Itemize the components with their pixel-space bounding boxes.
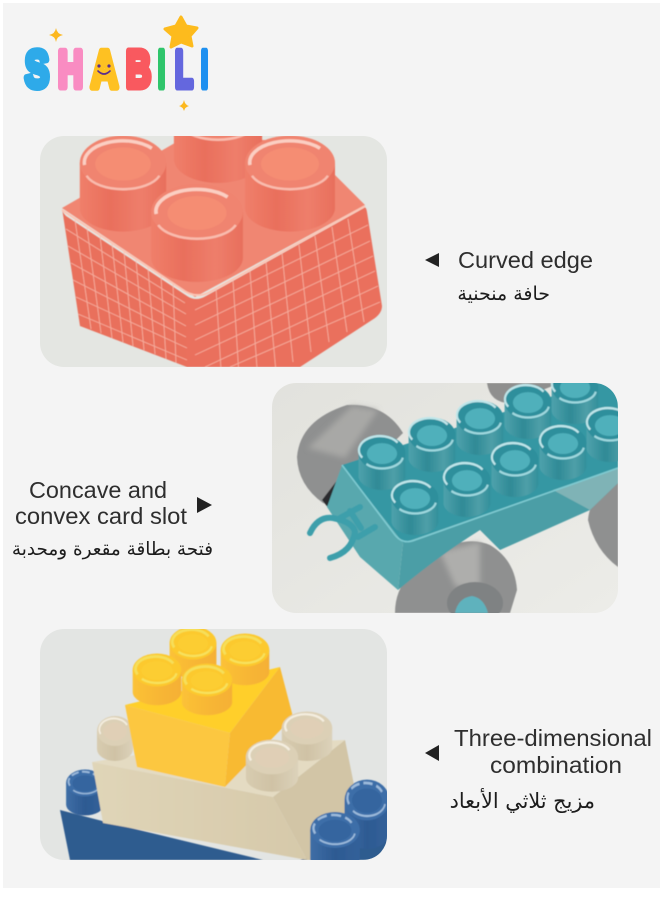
teal car body [327, 383, 618, 590]
yellow studs [133, 626, 269, 715]
label: three-dimensional combination: Three-dimensional [454, 725, 652, 751]
logo lettering [25, 41, 208, 99]
label: card slot Arabic: فتحة بطاقة مقعرة ومحدبة [12, 539, 213, 560]
label: three-dimensional Arabic: مزيج ثلاثي الأبعاد [450, 788, 595, 813]
arrow: card slot [197, 497, 212, 513]
coral brick body [62, 140, 383, 367]
teal clip hook [310, 507, 375, 558]
logo lettering: H [58, 41, 83, 99]
panel: coral brick photo [40, 136, 387, 367]
text: I [201, 41, 208, 99]
icon: small sparkle bottom [179, 100, 189, 111]
grey wheels [297, 383, 618, 624]
logo lettering: A [91, 41, 118, 99]
beige studs [246, 712, 332, 792]
beige brick [92, 716, 355, 860]
arrow: three-dimensional [425, 745, 439, 761]
icon: small sparkle left [49, 28, 63, 42]
logo lettering: B [126, 41, 151, 99]
label: three-dimensional combination: combination [490, 752, 622, 778]
panel: stacked bricks photo [40, 626, 390, 873]
studs [79, 136, 336, 282]
label: curved edge Arabic: حافة منحنية [457, 283, 550, 305]
logo lettering: S [25, 41, 49, 99]
arrow: curved edge [425, 253, 439, 267]
grid lines on brick [66, 218, 380, 367]
logo lettering: I [158, 41, 165, 99]
teal studs [357, 383, 618, 534]
label: three-dimensional combination [454, 725, 652, 778]
blue studs [310, 778, 387, 860]
icon: smiley face on A [97, 64, 111, 74]
blue base brick [60, 770, 387, 860]
yellow brick [125, 667, 293, 787]
label: concave and convex card slot: Concave and [29, 477, 167, 503]
logo: SHABILI [25, 17, 208, 111]
label: concave and convex card slot [15, 477, 188, 529]
panel: teal car brick photo [272, 383, 618, 613]
label: concave and convex card slot: convex card slot [15, 503, 188, 529]
icon: large yellow star [165, 17, 197, 47]
logo lettering: L [175, 41, 193, 99]
label: curved edge: Curved edge [458, 247, 593, 273]
